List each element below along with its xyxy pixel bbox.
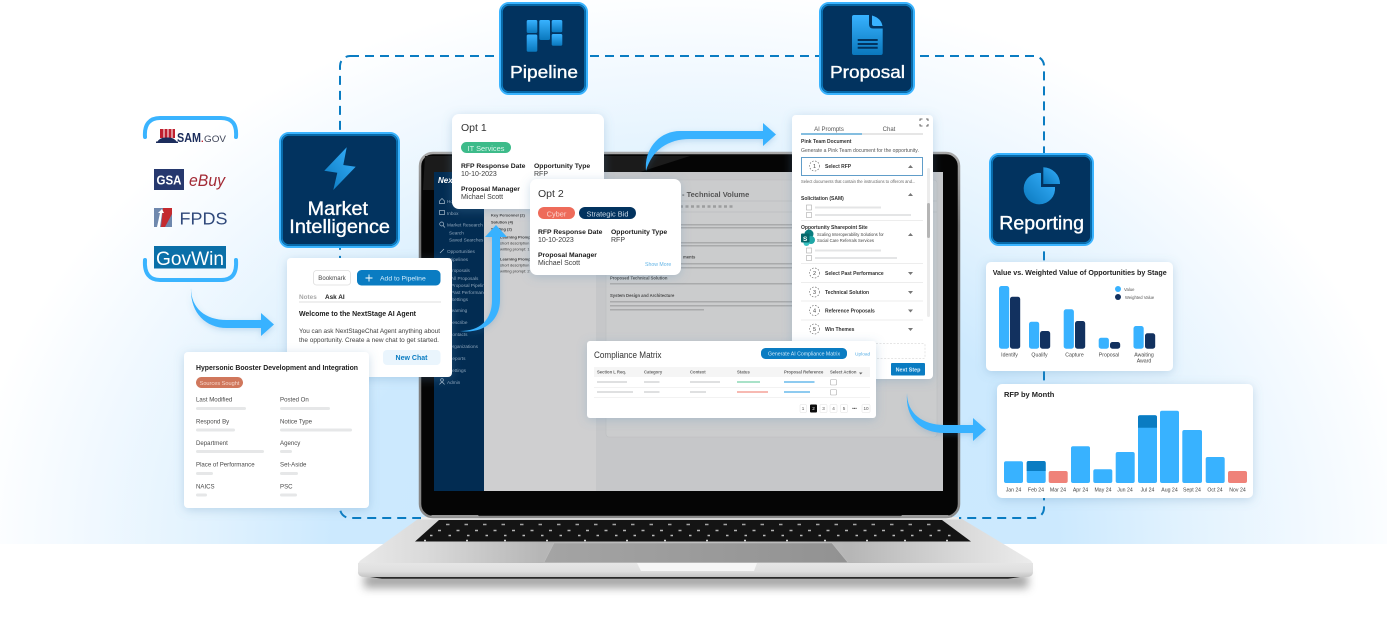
pagination: ••• <box>852 406 857 411</box>
panel: Compliance Matrix: Upload <box>855 352 871 358</box>
detail fields: Notice Type <box>280 418 313 426</box>
card: Ask AI agent: You can ask NextStageChat Agent anything about <box>299 328 440 335</box>
sidebar menu: Saved Searches <box>449 238 484 242</box>
card: Opt 1: RFP <box>534 171 548 178</box>
step 2: Select Past Performance <box>825 271 884 277</box>
arrow: pipeline to proposal <box>646 123 776 171</box>
card: Opt 1 <box>452 114 604 209</box>
next step button: Next Step <box>896 368 921 374</box>
card: Opt 1: Proposal Manager <box>461 186 520 193</box>
sidebar icons <box>440 198 445 384</box>
badge label: Intelligence <box>289 217 390 238</box>
stage labels: Award <box>1137 358 1151 364</box>
document editor: - Technical Volume <box>682 190 749 199</box>
panel: AI prompts: Scaling Interoperability Solutions for <box>817 232 884 237</box>
logo: SAM.gov: . <box>201 134 204 145</box>
logo bracket bottom <box>145 260 236 280</box>
logo text: NextStage <box>438 176 478 185</box>
step 5: Win Themes <box>825 327 855 333</box>
month labels: Jul 24 <box>1141 487 1155 493</box>
hinges <box>428 515 952 518</box>
chip: IT Services <box>461 142 511 153</box>
legend: Value <box>1124 287 1135 292</box>
sidebar menu: Pipelines <box>449 257 469 262</box>
badge: Pipeline <box>500 3 587 94</box>
tabs <box>801 127 923 134</box>
badge label: Pipeline <box>510 62 578 82</box>
left prompt column: Learning Prompt <box>500 256 533 262</box>
left prompt column: Solution (4) <box>491 220 514 224</box>
next step button <box>891 363 925 376</box>
left prompt column: Learning Prompt <box>500 234 533 240</box>
detail fields: Respond By <box>196 418 230 426</box>
table header: Proposal Reference <box>784 370 824 374</box>
card: Opt 1: Opportunity Type <box>534 163 590 170</box>
step 1: Select RFP: Select RFP <box>825 164 852 170</box>
tabs: AI Prompts <box>814 127 844 133</box>
screen background <box>434 172 943 491</box>
icon: kanban columns <box>527 20 562 52</box>
value bars <box>999 286 1144 349</box>
panel: AI prompts <box>792 115 933 379</box>
step 1: Select RFP <box>802 158 922 176</box>
month labels: Oct 24 <box>1207 487 1223 493</box>
badge: Proposal <box>820 3 914 94</box>
card: Opt 2: Proposal Manager <box>538 252 597 259</box>
placeholder bars <box>196 407 352 496</box>
icon: expand <box>920 119 928 126</box>
left prompt column: writing prompt: 1 <box>500 246 530 252</box>
laptop lid <box>420 153 959 517</box>
generate button: Generate AI Compliance Matrix <box>768 352 840 358</box>
panel: AI prompts: Social Care Referrals Services <box>817 238 874 243</box>
month labels <box>1006 487 1246 493</box>
front edge <box>358 563 1033 577</box>
left prompt column: writing prompt: 2 <box>500 268 530 274</box>
badge label: Reporting <box>999 214 1084 234</box>
generate button <box>761 348 847 359</box>
step 4: Reference Proposals <box>825 308 875 314</box>
icon: lightning bolt <box>324 147 356 190</box>
step 2 <box>810 268 913 278</box>
stage labels: Capture <box>1065 352 1084 358</box>
laptop <box>358 153 1033 588</box>
chip: Strategic Bid: Strategic Bid <box>587 210 628 218</box>
month labels: Feb 24 <box>1028 487 1044 493</box>
pagination: 4 <box>832 406 835 411</box>
sidebar menu: Settings <box>449 368 467 373</box>
step 5: 5 <box>813 327 816 333</box>
tabs: Chat <box>883 127 896 133</box>
keyboard <box>415 520 971 542</box>
card: Opt 2: Michael Scott <box>538 260 580 267</box>
chip: Cyber <box>538 207 575 219</box>
scrollbar <box>927 168 930 317</box>
badge label <box>289 199 390 238</box>
badge label: Market <box>308 199 369 220</box>
sidebar menu: Settings <box>451 297 469 302</box>
new chat button <box>383 350 440 365</box>
legend: Weighted Value <box>1125 295 1155 300</box>
card: Opt 2: Opportunity Type <box>611 229 667 236</box>
icon: document <box>852 15 883 55</box>
sidebar menu: Proposals <box>449 268 471 273</box>
card: Opt 2 <box>530 179 681 275</box>
document editor: Proposed Technical Solution <box>610 276 668 280</box>
badge: Reporting <box>990 154 1093 245</box>
detail fields: Set-Aside <box>280 462 307 468</box>
pagination: 10 <box>863 406 869 411</box>
detail fields: Agency <box>280 440 301 447</box>
arrow: sources to market intelligence card <box>191 288 274 336</box>
sidebar menu: Contacts <box>449 332 468 337</box>
logo: SAM.gov: GOV <box>204 134 227 145</box>
icon: sharepoint <box>801 230 815 246</box>
detail fields: Place of Performance <box>196 462 255 468</box>
card: Opt 2: RFP <box>611 237 625 244</box>
badge: Market Intelligence <box>280 133 399 247</box>
input box <box>801 344 925 358</box>
panel: Compliance Matrix <box>587 341 876 418</box>
chart: value vs weighted value: Value vs. Weighted Value of Opportunities by Stage <box>993 268 1167 277</box>
stage labels: Identify <box>1001 352 1018 358</box>
pagination: 5 <box>843 406 846 411</box>
sidebar menu: Describe <box>449 320 468 325</box>
add to pipeline button <box>357 270 440 286</box>
chart: RFP by month <box>997 384 1253 498</box>
left prompt column: Key Personnel (2) <box>491 212 525 218</box>
new chat button: New Chat <box>396 355 428 362</box>
detail fields: Posted On <box>280 396 309 404</box>
card: Opt 2: Opt 2 <box>538 188 564 200</box>
front notch <box>637 563 757 571</box>
card: Opt 2: 10-10-2023 <box>538 237 574 244</box>
sidebar menu: Inbox <box>447 211 459 216</box>
month labels: Aug 24 <box>1161 487 1178 493</box>
weighted value bars <box>1010 297 1155 349</box>
sidebar menu: Search <box>449 230 464 236</box>
step 3: 3 <box>813 290 816 296</box>
panel: AI prompts: Opportunity Sharepoint Site <box>801 225 868 231</box>
table header: Select Action <box>830 370 857 374</box>
pagination <box>800 404 870 412</box>
panel: Compliance Matrix: Compliance Matrix <box>594 350 662 360</box>
chip: Cyber: Cyber <box>547 210 567 218</box>
sidebar menu: Reports <box>449 356 466 361</box>
bookmark button: Bookmark <box>318 275 347 282</box>
logo: GovWin: GovWin <box>156 249 224 270</box>
panel: AI prompts: Select documents that contain the instructions to offerors and... <box>801 179 915 184</box>
sidebar menu <box>447 199 490 385</box>
step 4: 4 <box>813 308 816 314</box>
card: Opt 2: RFP Response Date <box>538 229 603 236</box>
logo: SAM.gov <box>156 129 227 145</box>
add to pipeline button: Add to Pipeline <box>380 275 426 282</box>
panel: AI prompts: Generate a Pink Team document for the opportunity. <box>801 148 919 154</box>
step 5 <box>810 324 913 334</box>
bezel glare <box>423 156 690 190</box>
month labels: Nov 24 <box>1229 487 1246 493</box>
stage labels: Proposal <box>1099 352 1119 358</box>
hinge strip <box>421 517 959 520</box>
sidebar menu: Learning <box>449 308 468 313</box>
stacked caps <box>1027 415 1157 471</box>
stage labels: Qualify <box>1031 352 1048 358</box>
table header: Category <box>644 370 663 374</box>
logo: GSA eBuy <box>154 169 227 190</box>
logo: GSA eBuy: eBuy <box>189 172 227 190</box>
month labels: Apr 24 <box>1073 487 1088 493</box>
icon: pie chart <box>1024 167 1060 204</box>
card: opportunity details: Hypersonic Booster Development and Integration <box>196 365 358 372</box>
detail fields <box>196 396 313 490</box>
sidebar menu: Market Research <box>447 222 483 228</box>
step 2: 2 <box>813 271 816 277</box>
sidebar menu: Past Performance <box>451 290 489 295</box>
bookmark button <box>314 270 350 285</box>
card: Opt 1: Opt 1 <box>461 122 487 134</box>
card: Opt 2: Show More <box>645 262 671 268</box>
month labels: May 24 <box>1094 487 1112 493</box>
sidebar menu: Admin <box>447 380 461 385</box>
legend <box>1115 286 1155 300</box>
arrow: AI agent up to pipeline <box>460 225 507 331</box>
step 1: Select RFP: 1 <box>813 164 816 170</box>
arrow: proposal to reporting <box>907 393 986 441</box>
table header: Section L Req. <box>597 370 626 374</box>
sidebar menu: Home <box>447 199 460 204</box>
left prompt column <box>484 172 596 491</box>
chip: IT Services: IT Services <box>468 144 505 153</box>
chip: Sources Sought: Sources Sought <box>200 381 240 387</box>
pagination: 1 <box>802 406 805 411</box>
month labels: Mar 24 <box>1050 487 1066 493</box>
month bars <box>1004 411 1225 483</box>
document editor <box>606 180 937 437</box>
detail fields: NAICS <box>196 484 215 490</box>
card: Ask AI agent: Ask AI <box>325 294 345 301</box>
logo bracket top <box>145 118 236 137</box>
trackpad <box>544 543 848 562</box>
card: Ask AI agent: Notes <box>299 294 317 301</box>
chip: Sources Sought <box>196 377 243 388</box>
sidebar menu: All Proposals <box>451 276 479 281</box>
pagination: 2 <box>812 406 815 411</box>
chart: RFP by month: RFP by Month <box>1004 390 1055 399</box>
stage labels <box>1001 352 1154 364</box>
month labels: Jun 24 <box>1117 487 1133 493</box>
chart: value vs weighted value <box>986 262 1173 371</box>
table rows <box>594 380 870 398</box>
laptop shadow <box>364 574 1028 588</box>
left prompt column: Staffing (2) <box>491 226 513 232</box>
table header <box>594 367 870 377</box>
document editor: ments <box>683 254 696 260</box>
bottom edge line <box>370 577 1020 579</box>
pagination: 3 <box>822 406 825 411</box>
logo: GSA eBuy: GSA <box>156 174 182 188</box>
red bars <box>1049 471 1247 483</box>
sidebar menu: Organizations <box>449 344 479 349</box>
detail fields: PSC <box>280 484 293 490</box>
step 3 <box>810 287 913 297</box>
panel: AI prompts: Solicitation (SAM) <box>801 196 844 202</box>
card: Ask AI agent: the opportunity. Create a new chat to get started. <box>299 337 439 344</box>
sidebar menu: Proposal Pipelines <box>451 283 490 288</box>
step 3: Technical Solution <box>825 290 869 296</box>
icon: sharepoint: S <box>803 236 808 243</box>
document editor: System Design and Architecture <box>610 293 675 298</box>
detail fields: Last Modified <box>196 396 232 404</box>
logo: FPDS: FPDS <box>180 208 228 228</box>
card: Opt 1: 10-10-2023 <box>461 171 497 178</box>
card: opportunity details <box>184 352 369 508</box>
sidebar <box>434 172 490 491</box>
left prompt column: short description <box>500 240 529 246</box>
badge label: Proposal <box>830 62 905 82</box>
detail fields: Department <box>196 440 228 447</box>
left prompt column: short description <box>500 262 529 268</box>
sidebar menu: Opportunities <box>447 249 476 254</box>
dashed workflow outline <box>340 56 1044 518</box>
card: Ask AI agent: Welcome to the NextStage AI Agent <box>299 310 417 318</box>
table header: Status <box>737 370 750 374</box>
table header: Context <box>690 370 706 374</box>
card: Opt 1: Michael Scott <box>461 194 503 201</box>
month labels: Jan 24 <box>1006 487 1021 493</box>
stage labels: Awaiting <box>1134 352 1154 358</box>
logo: SAM.gov: SAM <box>177 131 201 145</box>
card: Opt 1: RFP Response Date <box>461 163 526 170</box>
laptop base deck <box>358 519 1033 577</box>
step 4 <box>810 306 913 316</box>
card: Ask AI agent <box>287 258 452 377</box>
logo: FPDS <box>154 208 228 228</box>
chip: Strategic Bid <box>579 207 636 219</box>
panel: AI prompts: Pink Team Document <box>801 139 852 145</box>
month labels: Sept 24 <box>1183 487 1201 493</box>
